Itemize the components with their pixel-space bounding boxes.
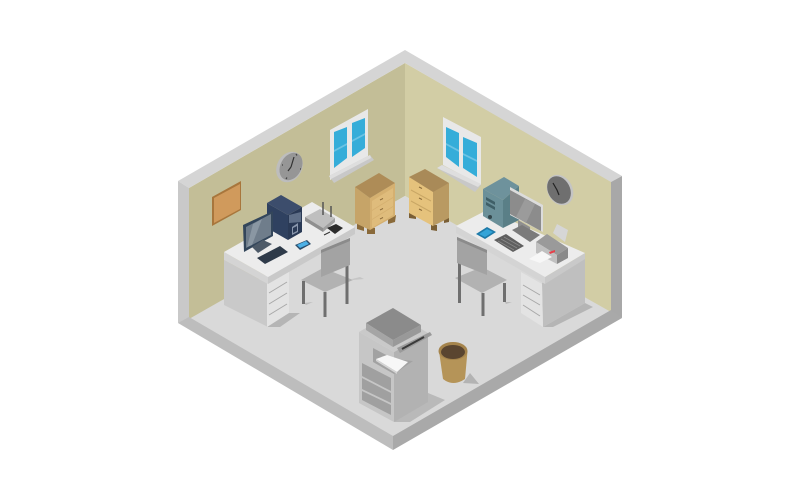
left desk (224, 202, 355, 327)
right dresser (409, 169, 449, 231)
icon: left wall clock (271, 147, 308, 187)
printer (529, 224, 568, 264)
left dresser (355, 173, 396, 234)
left desk computer (243, 195, 302, 264)
left window (329, 109, 374, 183)
waste bin (438, 342, 479, 384)
photocopier (359, 308, 445, 422)
cork board (212, 181, 241, 226)
right desk (456, 210, 593, 327)
right desk computer (476, 177, 543, 252)
icon: right wall clock (541, 170, 579, 210)
left chair (301, 238, 364, 317)
right chair (455, 237, 512, 316)
right window (437, 117, 481, 192)
room shell (178, 50, 622, 450)
phone, router and adapter (295, 202, 343, 250)
